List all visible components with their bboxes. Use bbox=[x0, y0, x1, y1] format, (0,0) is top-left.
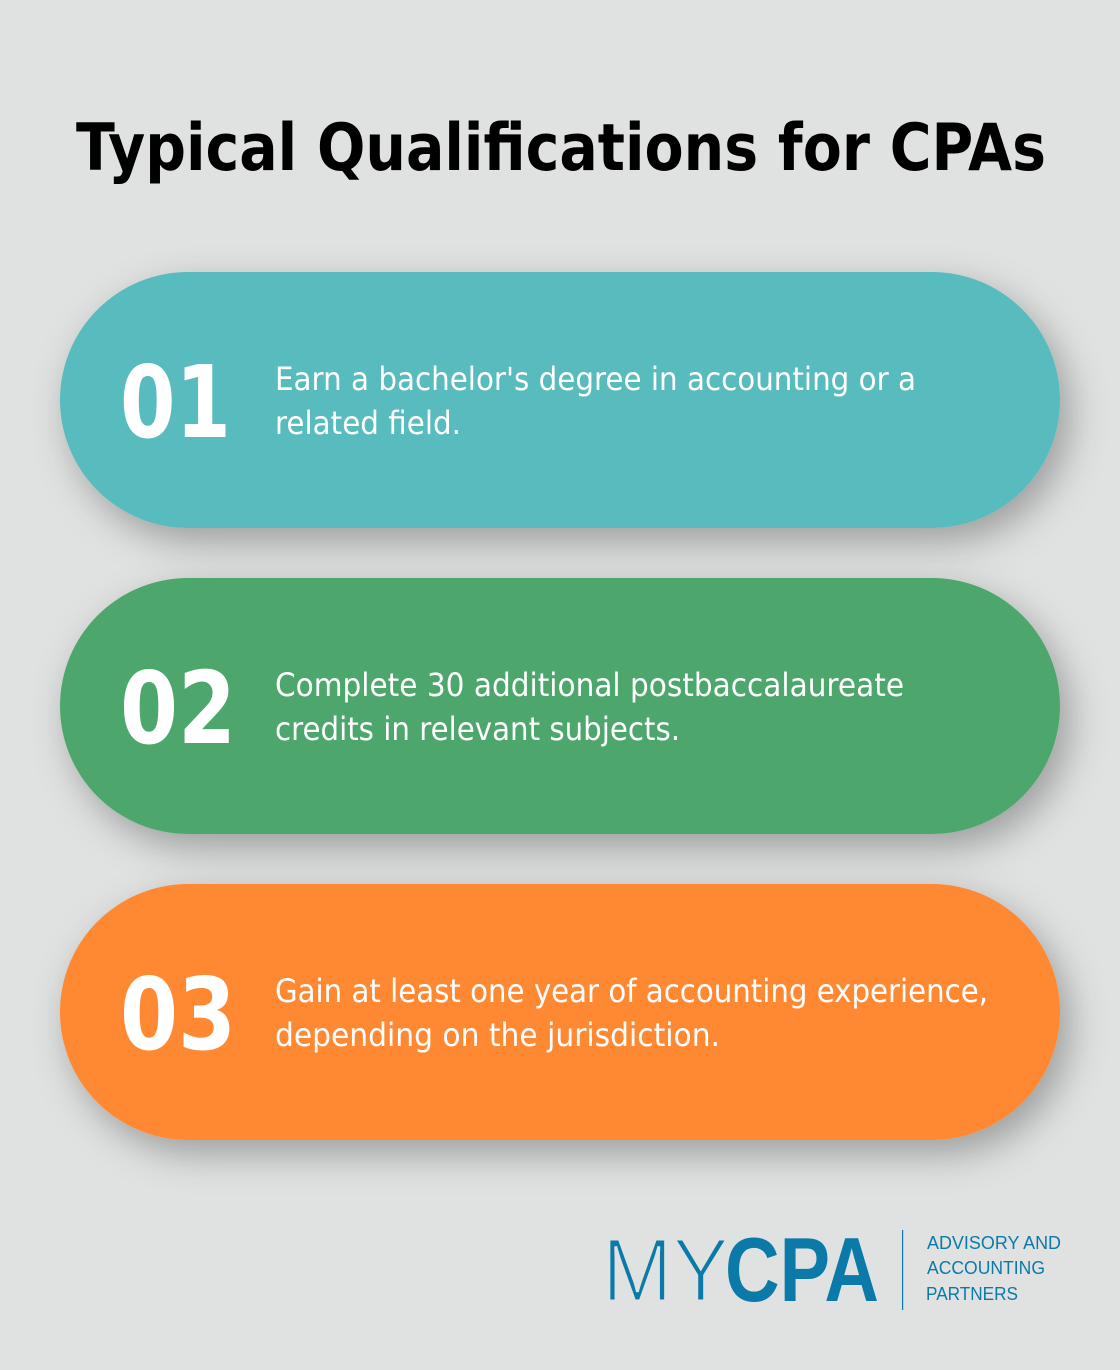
pill background 02 bbox=[60, 578, 1060, 834]
logo tagline: PARTNERS bbox=[926, 1283, 1018, 1304]
number 02: 02 bbox=[120, 650, 236, 767]
text block 03: Gain at least one year of accounting experience, bbox=[275, 972, 988, 1010]
logo tagline: ACCOUNTING bbox=[927, 1257, 1045, 1278]
pill background 03 bbox=[60, 884, 1060, 1140]
panel: step 01 bbox=[60, 272, 1060, 528]
number 01: 01 bbox=[120, 344, 231, 461]
text block 02: Complete 30 additional postbaccalaureate bbox=[275, 666, 904, 704]
text block 01: related field. bbox=[275, 404, 461, 442]
logo: MYCPA bbox=[602, 1220, 1061, 1321]
logo tagline: ADVISORY AND bbox=[927, 1232, 1061, 1253]
text block 01: Earn a bachelor's degree in accounting or a bbox=[275, 360, 916, 398]
logo divider bbox=[902, 1230, 903, 1310]
panel: step 03 bbox=[60, 884, 1060, 1140]
logo wordmark MY: MY bbox=[602, 1221, 729, 1321]
number 03: 03 bbox=[120, 956, 236, 1073]
logo wordmark CPA: CPA bbox=[725, 1220, 879, 1321]
text block 03: depending on the jurisdiction. bbox=[275, 1016, 720, 1054]
panel: step 02 bbox=[60, 578, 1060, 834]
text block 02: credits in relevant subjects. bbox=[275, 710, 680, 748]
pill background 01 bbox=[60, 272, 1060, 528]
